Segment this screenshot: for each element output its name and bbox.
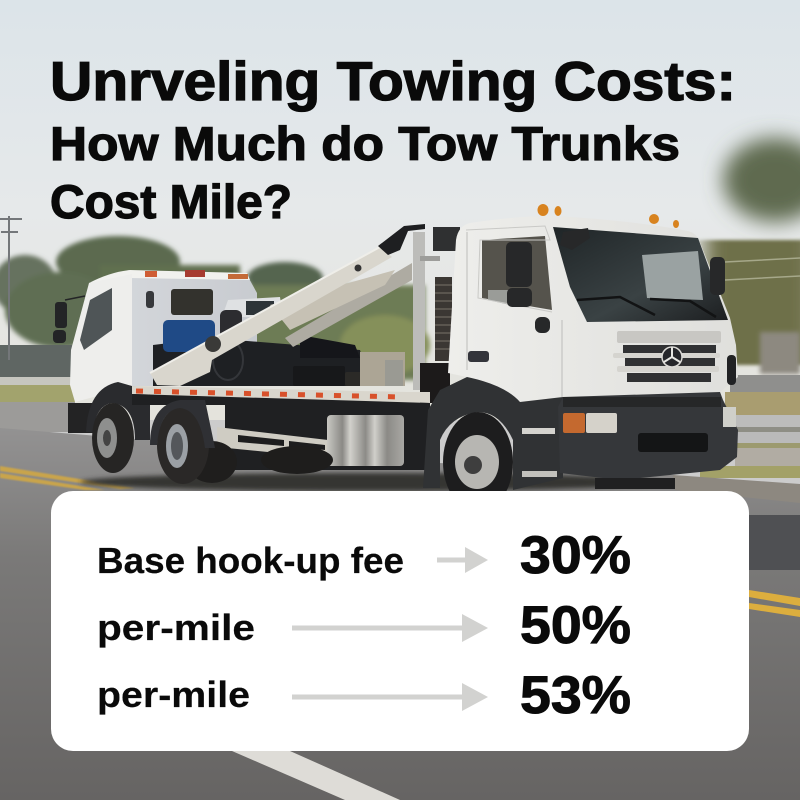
background: sky [0,0,800,420]
title line 1: Unrveling Towing Costs: [50,50,736,112]
flatbed [132,386,430,470]
background: utility pole [0,216,22,360]
windshield [553,227,728,322]
title [50,50,736,228]
row: per-mile 50% [97,596,631,655]
row: per-mile 53%: 53% [520,666,631,725]
background: tree line [0,236,430,380]
fuel tank [327,415,404,466]
road [0,428,800,800]
door window [482,236,552,310]
row: per-mile 53% [97,666,631,725]
boom arms [150,224,425,386]
cab nameplate [617,331,721,343]
truck [53,204,738,512]
rear wheels [92,403,333,484]
background: blurred trees right [705,138,800,374]
background: verge [0,375,800,478]
title line 3: Cost Mile? [50,175,292,228]
row: base hook-up fee: 30% [520,526,631,585]
road markings [0,466,800,800]
title line 2: How Much do Tow Trunks [50,117,680,170]
row: base hook-up fee: Base hook-up fee [97,540,404,581]
rear cab mirrors [53,296,85,343]
load: vehicle and equipment on the bed [153,297,405,386]
road dark patch right [749,515,800,570]
row: per-mile 50%: per-mile [97,607,255,648]
rear fender [150,400,215,448]
cab lights [538,204,679,228]
mast [413,227,460,403]
front cab body [448,204,738,402]
front wheel [443,412,513,512]
rear cab body [53,270,257,440]
fender and cab lower [423,377,563,490]
side mirrors [506,228,725,333]
row: base hook-up fee [97,526,631,585]
grille [613,345,736,385]
truck shadow [80,473,660,491]
panel: cost breakdown [51,491,749,751]
background: distant building left [0,345,72,377]
side guard [217,427,328,458]
row: per-mile 50%: 50% [520,596,631,655]
row: per-mile 53%: per-mile [97,674,250,715]
front bumper [522,392,738,489]
